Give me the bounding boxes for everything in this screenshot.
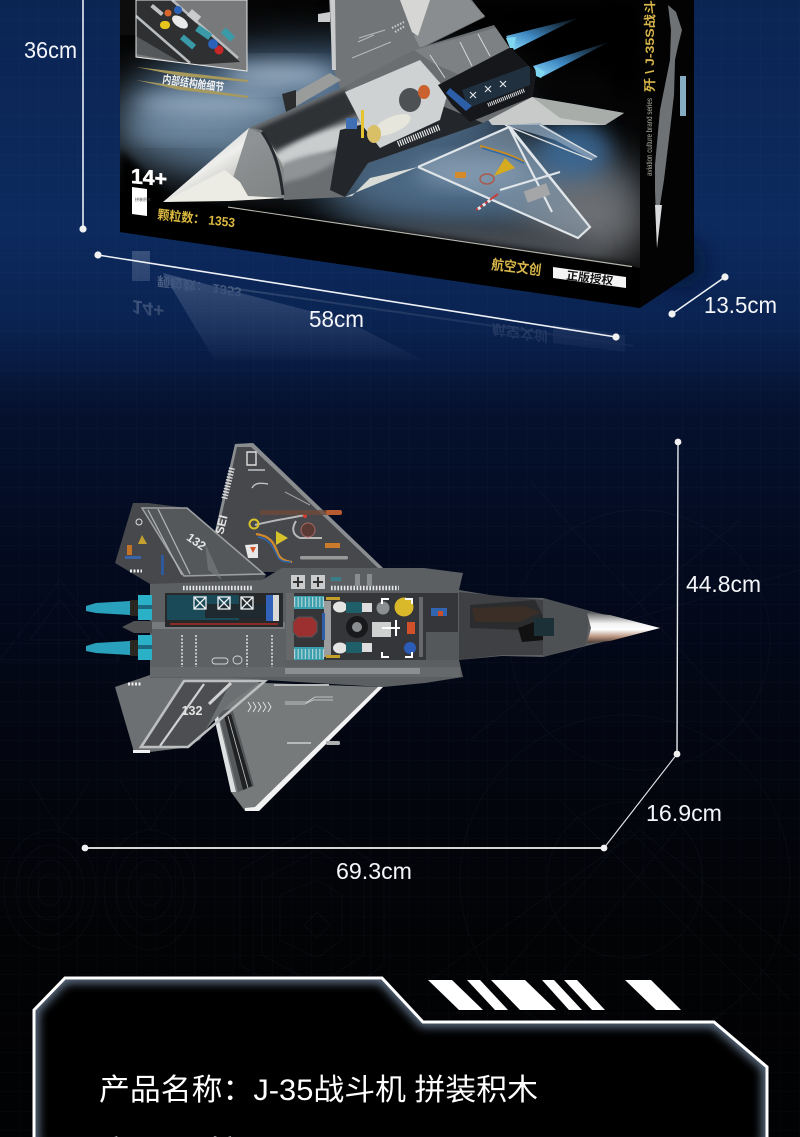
label 16.9cm: 16.9cm	[646, 800, 722, 826]
hatch stripe details	[182, 635, 272, 667]
upper main wing: SEI	[212, 514, 231, 536]
nose cone	[587, 613, 660, 643]
cockpit pale section	[345, 60, 448, 148]
lower engine nozzle	[86, 635, 152, 660]
nose cone	[163, 128, 284, 202]
licensed badge: 正版授权	[566, 268, 614, 288]
fuselage	[150, 568, 660, 687]
front fuselage and cockpit	[459, 592, 590, 660]
rear engine bay	[438, 47, 540, 122]
box-art age rating: 14+	[131, 165, 167, 191]
upper tail fin: 132	[184, 530, 209, 553]
label 69.3cm: 69.3cm	[336, 858, 412, 884]
box-art logo tile	[132, 187, 151, 216]
side face plane	[655, 5, 682, 248]
lower tail fin: 132	[182, 704, 202, 718]
small transparent stabiliser	[505, 123, 597, 160]
grey main wing rear	[329, 0, 485, 90]
near wing stub	[287, 73, 341, 107]
box-art logo tile: 拼装积木	[135, 196, 151, 202]
product box: side face	[640, 0, 694, 308]
label 13.5cm: 13.5cm	[704, 292, 777, 318]
label 36cm: 36cm	[24, 37, 77, 63]
top hump	[414, 28, 510, 74]
product name: 产品名称：J-35战斗机 拼装积木	[99, 1074, 538, 1107]
label 44.8cm: 44.8cm	[686, 571, 761, 597]
brand label: 航空文创	[491, 256, 542, 278]
decorative slanted stripes	[428, 980, 681, 1010]
engine bay	[165, 593, 283, 627]
inset caption	[136, 67, 248, 98]
piece count: 颗粒数： 1353	[157, 207, 236, 230]
inset caption: 内部结构舱细节	[162, 72, 225, 95]
side face small text: aviation culture brand series	[645, 98, 654, 176]
lower transparent wing	[418, 127, 590, 238]
licensed badge	[553, 267, 626, 288]
far transparent wing	[486, 97, 624, 125]
upper engine nozzle	[86, 595, 152, 620]
central bay	[286, 593, 458, 660]
wing markings	[224, 468, 232, 500]
lower main wing	[212, 682, 383, 811]
dimension: model length	[82, 845, 607, 884]
box reflection on floor: 颗粒数： 1353	[157, 273, 241, 300]
box reflection on floor: 航空文创	[492, 321, 548, 345]
dimension: box depth	[668, 273, 777, 318]
inset detail photo	[136, 0, 247, 71]
box reflection on floor	[132, 251, 633, 350]
box reflection on floor: 14+	[132, 295, 164, 320]
box-art transparent model jet	[163, 0, 624, 238]
side face title: 歼 \ J-35S战斗	[642, 0, 657, 92]
centre tail spike	[122, 621, 152, 633]
label 58cm: 58cm	[309, 306, 364, 332]
light swirl band	[275, 118, 361, 166]
product box: front face artwork	[110, 0, 650, 310]
upper main wing	[212, 443, 383, 572]
dimension: box length	[94, 251, 620, 341]
dimension: box height	[24, 0, 87, 233]
top vents	[183, 586, 399, 590]
dimension: model width	[674, 439, 761, 757]
top view model jet	[86, 443, 660, 811]
lower tail fin	[115, 675, 266, 753]
dark lower belly	[330, 105, 483, 197]
fuselage body	[250, 25, 536, 200]
product info panel	[34, 978, 767, 1137]
dimension: model height	[604, 754, 722, 848]
side face swatch	[680, 76, 686, 116]
box art divider line	[228, 206, 632, 267]
engine flames	[506, 18, 609, 78]
box shadow	[654, 236, 706, 288]
upper tail fin	[115, 503, 266, 584]
dark upper band	[255, 90, 360, 150]
